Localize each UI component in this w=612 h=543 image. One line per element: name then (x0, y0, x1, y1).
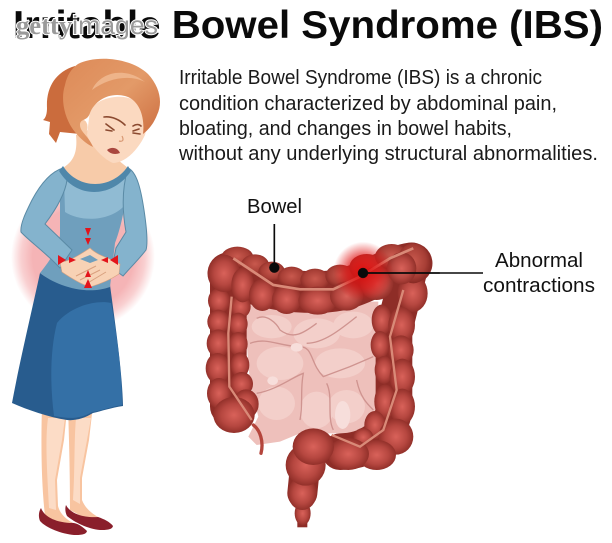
nose (119, 136, 123, 141)
ear (78, 120, 88, 134)
pain halo (11, 185, 155, 329)
hair back ponytail (43, 66, 85, 143)
torso (40, 170, 128, 290)
label: Bowel: Bowel (247, 195, 302, 218)
watermark: gettyimages (16, 10, 158, 40)
mouth (107, 148, 120, 154)
hair highlight (92, 73, 145, 90)
title: Irritable Bowel Syndrome (IBS) (13, 4, 603, 47)
description text: bloating, and changes in bowel habits, (179, 117, 512, 140)
hands (60, 248, 120, 287)
face (87, 97, 146, 163)
fingers (76, 266, 106, 284)
description text: without any underlying structural abnormalities. (178, 142, 598, 165)
colon base tube (228, 263, 412, 493)
gap between hands (80, 255, 98, 263)
appendix (253, 425, 262, 453)
illustration: colon and small intestine (206, 224, 440, 527)
illustration: woman in pain (11, 59, 160, 535)
pointer dots and lines (269, 224, 440, 278)
right arm (112, 168, 147, 276)
description text: condition characterized by abdominal pain, (179, 92, 557, 115)
skirt (12, 273, 123, 420)
legs (41, 405, 100, 523)
left arm (21, 168, 72, 268)
descending colon (328, 275, 428, 470)
pointer line to abnormal contractions (440, 272, 483, 274)
description text (178, 66, 598, 165)
label: Abnormal contractions: contractions (483, 274, 595, 297)
label: Abnormal contractions (483, 249, 595, 297)
hair front (63, 59, 160, 147)
eyebrows and closed eyes (104, 117, 141, 134)
rectum (286, 428, 334, 527)
description text: Irritable Bowel Syndrome (IBS) is a chronic (179, 66, 542, 89)
label: Abnormal contractions: Abnormal (495, 249, 583, 272)
red pain arrows (58, 228, 118, 288)
ascending colon (206, 288, 259, 433)
transverse colon (221, 243, 430, 291)
neck (63, 125, 128, 186)
inflamed area (333, 242, 393, 302)
small intestine (245, 302, 378, 445)
shoes (39, 505, 113, 535)
